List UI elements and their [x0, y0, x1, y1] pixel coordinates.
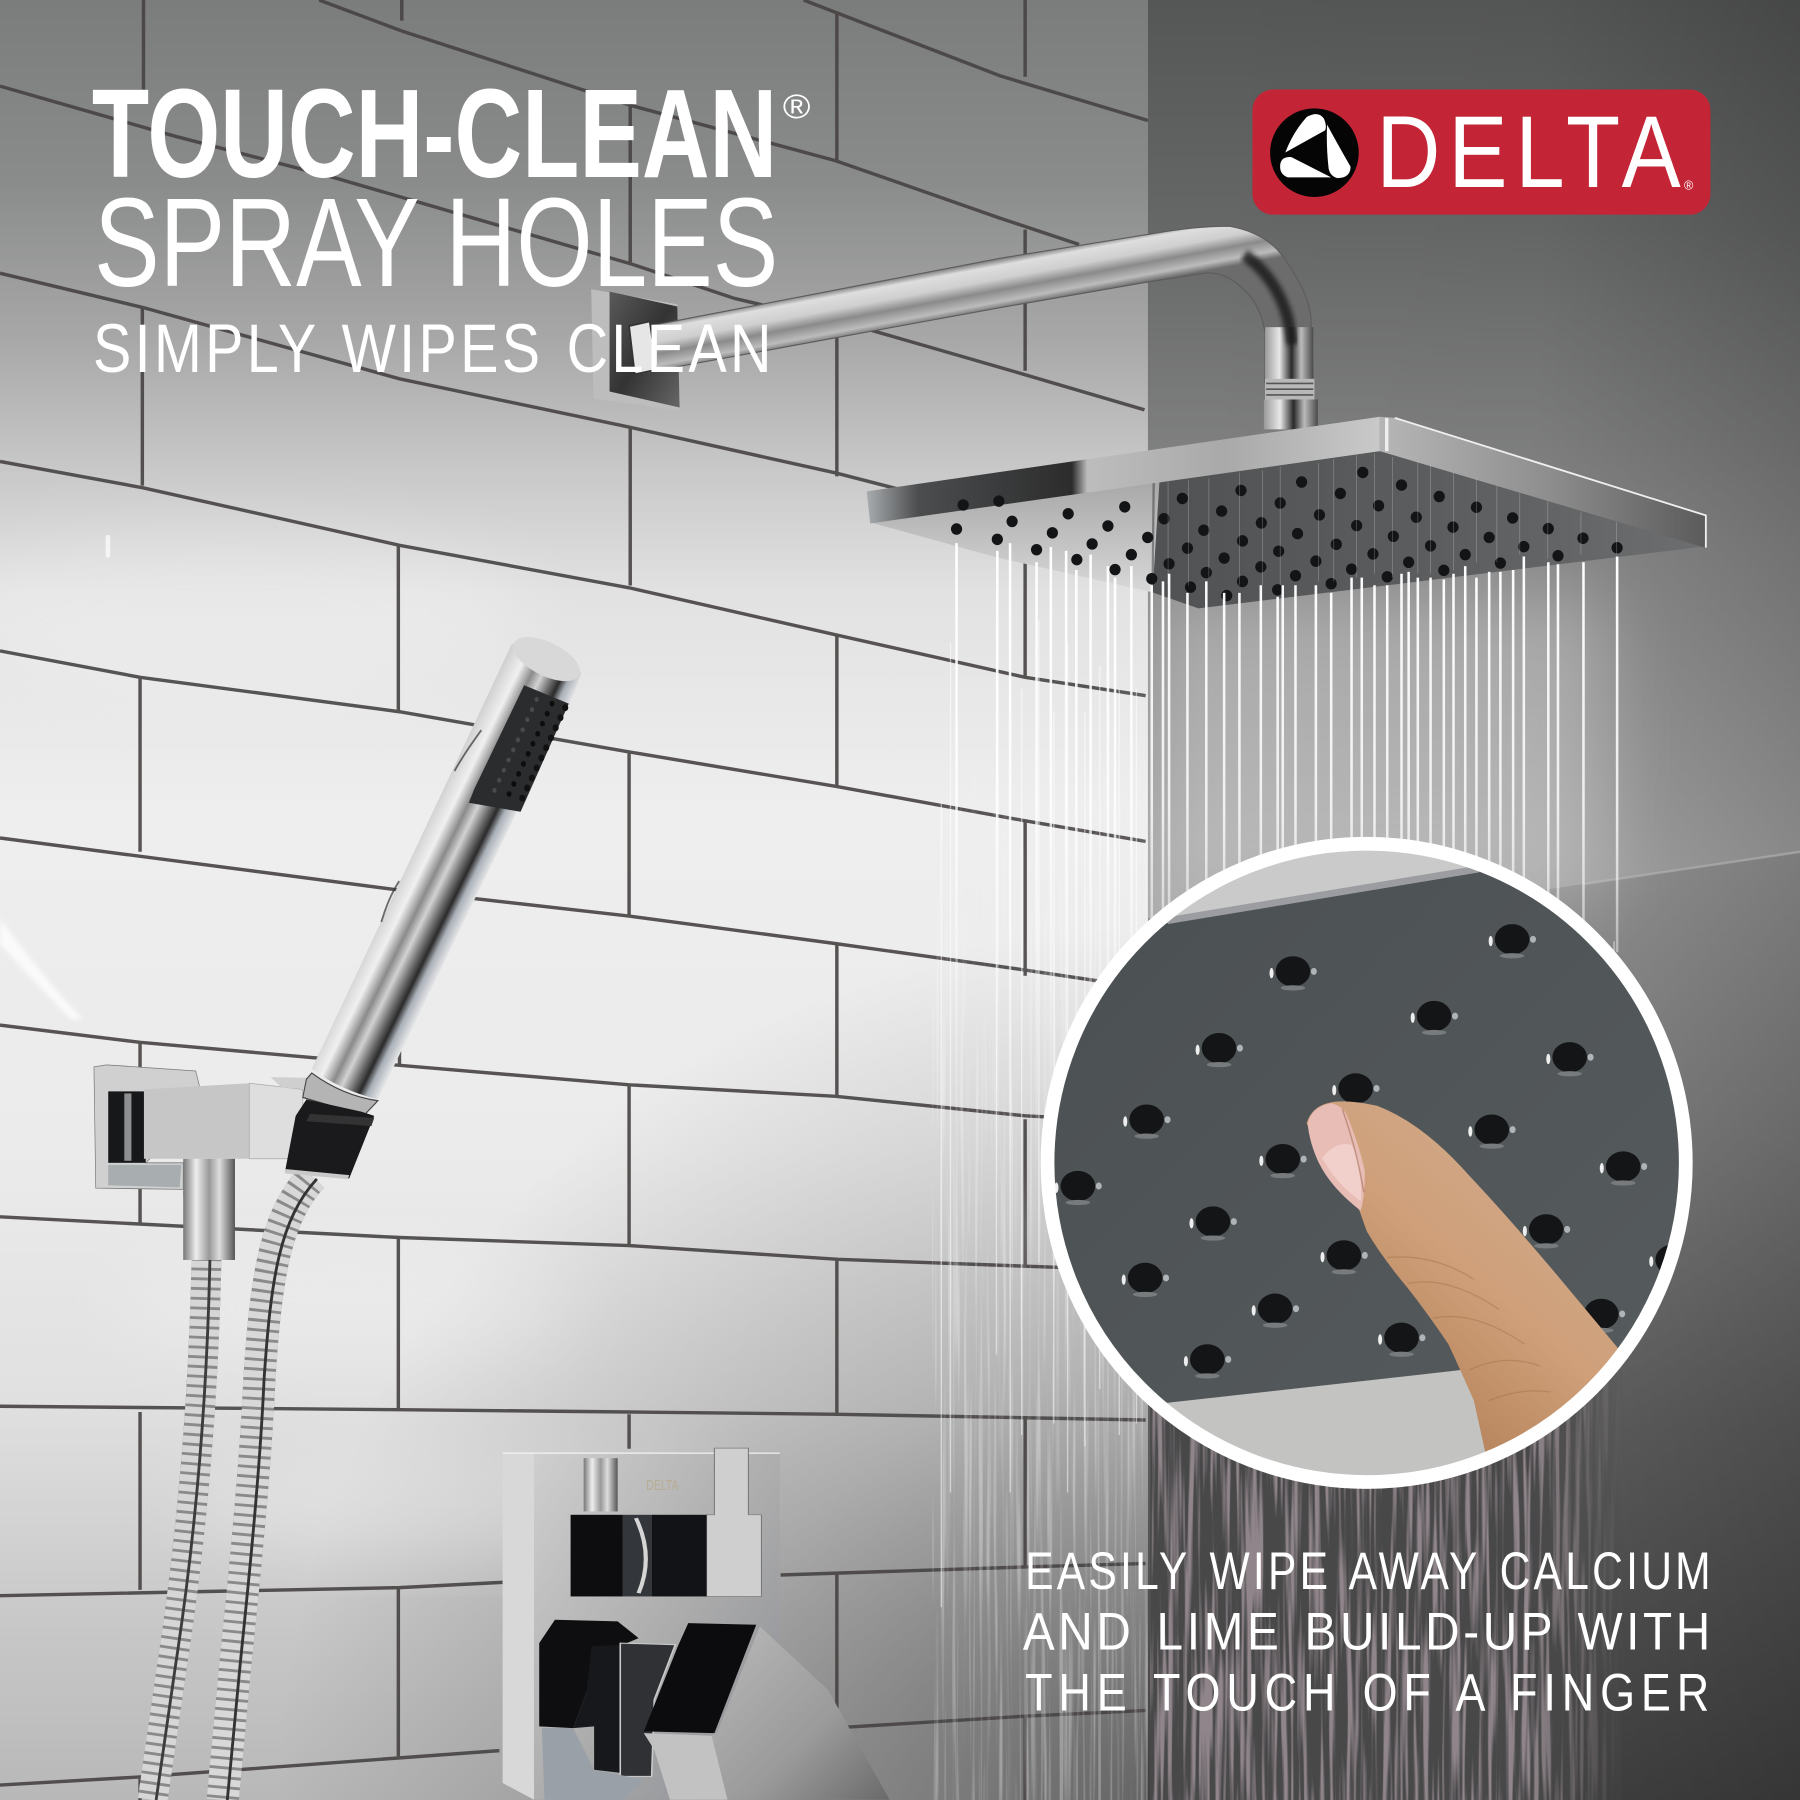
- tube of hand shower: [312, 628, 585, 1100]
- icon: Delta triangle emblem: [1270, 108, 1359, 197]
- falling water streams: [941, 453, 1617, 1607]
- faint water streaks over tiles: [932, 806, 1148, 1800]
- rain shower head: [867, 417, 1706, 608]
- headline block: [92, 63, 810, 387]
- grey back wall: [1148, 0, 1800, 1800]
- trim plate: [503, 1451, 780, 1800]
- copy line 2: AND LIME BUILD-UP WITH: [1023, 1603, 1714, 1662]
- hose right: [223, 1177, 317, 1800]
- finger: [1306, 1101, 1618, 1452]
- wall elbow stem: [183, 1159, 235, 1260]
- underside left reflective panel: [870, 482, 1159, 592]
- Delta logo badge: [1252, 90, 1710, 215]
- lower lever handle: [539, 1620, 890, 1800]
- square holder block: [144, 1077, 310, 1159]
- title line 1: TOUCH-CLEAN: [92, 63, 777, 204]
- finger creases: [1387, 1257, 1550, 1401]
- close-up image area: [1054, 850, 1679, 1476]
- hose left: [153, 1251, 210, 1800]
- subtitle: SIMPLY WIPES CLEAN: [93, 310, 775, 387]
- body copy: [1023, 1542, 1715, 1722]
- light strip above the panel: [1166, 850, 1468, 924]
- Delta wordmark: DELTA: [1376, 95, 1689, 209]
- vertical drop section: [1265, 327, 1313, 382]
- panel spray holes: [1054, 924, 1697, 1379]
- black swivel cradle: [285, 1100, 374, 1179]
- left plate edge: [867, 417, 1380, 523]
- right plate edge: [1380, 417, 1706, 548]
- hand shower assembly: [94, 628, 585, 1800]
- tile grout lines: [0, 0, 1148, 1800]
- spray panel with nozzles: [469, 685, 569, 812]
- wall flange: [591, 289, 680, 411]
- diverter valve trim: [503, 1448, 890, 1800]
- horizontal pipe and elbow: [643, 226, 1313, 382]
- light strip below the panel: [1166, 1370, 1486, 1476]
- callout white ring: [1048, 844, 1686, 1482]
- upper handle: [571, 1448, 761, 1596]
- underside right dark panel: [1153, 451, 1705, 608]
- water streaks at bottom of the shower: [1150, 1372, 1627, 1800]
- arm collar: [629, 321, 657, 374]
- wall backplate: [94, 1065, 199, 1189]
- title line 2: SPRAY HOLES: [94, 172, 778, 313]
- collar ring: [303, 1073, 378, 1116]
- registered mark: ®: [783, 88, 810, 126]
- threaded drop: [1264, 379, 1318, 429]
- wordmark registered mark: ®: [1684, 178, 1694, 192]
- callout: close-up of finger on spray hole: [1040, 836, 1693, 1489]
- spray nozzles: [951, 467, 1623, 601]
- shower arm: [591, 226, 1318, 429]
- tiled wall background: [0, 0, 1148, 1800]
- fingernail: [1308, 1103, 1365, 1211]
- valve engraved logo: DELTA: [646, 1477, 678, 1494]
